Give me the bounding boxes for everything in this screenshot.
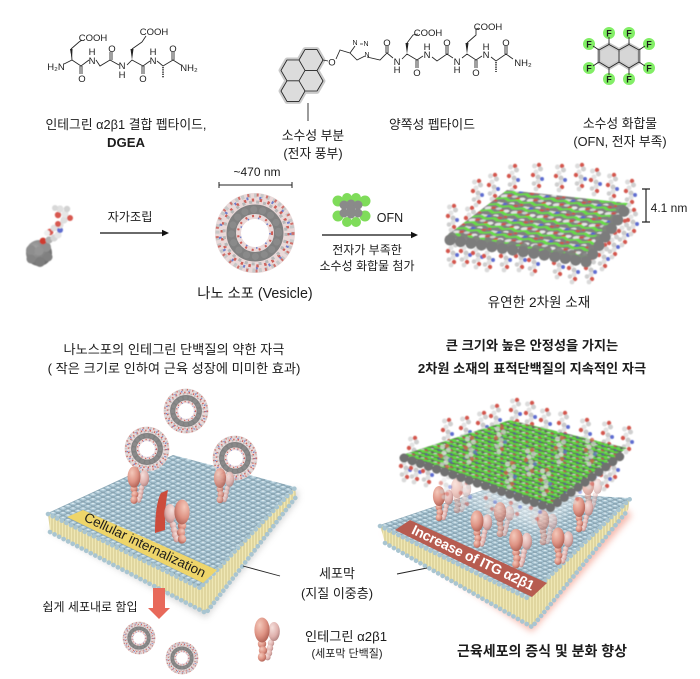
molecule: amphiphilic peptide: NH₂ xyxy=(514,58,532,69)
haze under the 2D sheet xyxy=(450,480,590,530)
dimension: about 470 nm: ~470 nm xyxy=(233,165,281,179)
molecule: amphiphilic peptide: O xyxy=(502,38,510,49)
integrin: under right vesicle xyxy=(214,468,234,503)
molecule: amphiphilic peptide: O xyxy=(328,58,336,68)
molecule: amphiphilic peptide: H xyxy=(483,42,490,53)
label: OFN: OFN xyxy=(377,211,403,225)
integrin: legend xyxy=(254,618,280,662)
dimension: 4.1 nm xyxy=(642,189,687,222)
molecule: pyrene hydrophobic part xyxy=(281,50,323,101)
integrins: on right membrane xyxy=(433,475,602,568)
molecule: amphiphilic peptide: N xyxy=(352,40,358,47)
molecule: amphiphilic peptide: N xyxy=(394,57,401,68)
band: cellular internalization: Cellular internalization xyxy=(82,510,208,580)
molecule: amphiphilic peptide: N xyxy=(363,41,369,48)
molecule: amphiphilic peptide xyxy=(323,22,532,79)
label: DGEA peptide: DGEA xyxy=(107,135,146,150)
label: DGEA peptide xyxy=(46,117,206,150)
molecule: DGEA peptide: H xyxy=(150,47,157,58)
molecule model: single peptide amphiphile xyxy=(26,205,73,267)
molecule: OFN: F xyxy=(606,28,612,38)
vesicle: internalized 1 xyxy=(123,622,155,654)
heading: weak stimulation by nano vesicle: ( 작은 크기로 인하여 근육 성장에 미미한 효과) xyxy=(48,361,300,376)
2D sheet: flexible material xyxy=(445,163,639,284)
molecule: DGEA peptide: COOH xyxy=(140,27,168,38)
molecule: OFN: F xyxy=(586,40,592,50)
heading: sustained stimulation by 2D material xyxy=(418,338,646,376)
molecule: DGEA peptide: O xyxy=(108,44,116,55)
integrin: centre xyxy=(164,500,190,544)
label: hydrophobic compound OFN xyxy=(573,116,667,149)
molecule: DGEA peptide: N xyxy=(119,61,126,72)
label: hydrophobic compound OFN: (OFN, 전자 부족) xyxy=(573,134,667,149)
heading: weak stimulation by nano vesicle xyxy=(48,342,300,376)
2D sheet: on membrane xyxy=(399,398,634,524)
molecule: OFN: F xyxy=(646,64,652,74)
label: self-assembly: 자가조립 xyxy=(108,210,152,224)
molecule: DGEA peptide: O xyxy=(139,74,147,85)
label: flexible 2D material: 유연한 2차원 소재 xyxy=(488,295,590,310)
label: hydrophobic compound OFN: 소수성 화합물 xyxy=(583,116,657,131)
panel: left cell membrane xyxy=(48,455,298,618)
band: increase of ITG: Increase of ITG α2β1 xyxy=(409,521,537,594)
curved red internalization arrow xyxy=(155,490,168,533)
label: muscle cell proliferation: 근육세포의 증식 및 분화 향상 xyxy=(457,643,627,659)
molecule: amphiphilic peptide: N xyxy=(364,52,370,59)
molecule: DGEA peptide: O xyxy=(78,74,86,85)
heading: weak stimulation by nano vesicle: 나노스포의 인테그린 단백질의 약한 자극 xyxy=(64,342,284,357)
molecule: OFN: F xyxy=(586,64,592,74)
vesicle: main xyxy=(217,195,293,271)
label: integrin legend: 인테그린 α2β1 xyxy=(305,629,387,644)
molecule: DGEA peptide xyxy=(47,27,198,85)
label: add electron-poor compound: 소수성 화합물 첨가 xyxy=(320,259,414,273)
label: hydrophobic part xyxy=(282,128,344,161)
molecule: DGEA peptide: NH₂ xyxy=(180,63,198,74)
molecule: amphiphilic peptide: O xyxy=(443,38,451,49)
molecule: amphiphilic peptide: H xyxy=(394,65,401,76)
molecule: OFN: F xyxy=(646,40,652,50)
leader line: pyrene xyxy=(307,103,309,121)
vesicle: floating top xyxy=(165,390,207,432)
label: cell membrane xyxy=(301,566,373,601)
label: add electron-poor compound: 전자가 부족한 xyxy=(332,243,402,257)
label: nano vesicle: 나노 소포 (Vesicle) xyxy=(197,285,313,302)
leader line: left membrane xyxy=(243,566,280,576)
leader line: right membrane xyxy=(397,567,432,574)
molecule: DGEA peptide: N xyxy=(89,56,96,67)
molecule: amphiphilic peptide: N xyxy=(424,50,431,61)
label: cell membrane: 세포막 xyxy=(319,566,355,581)
molecule: DGEA peptide: N xyxy=(150,56,157,67)
panel: right cell membrane xyxy=(380,490,632,632)
heading: sustained stimulation by 2D material: 2차원 소재의 표적단백질의 지속적인 자극 xyxy=(418,361,646,376)
molecule: amphiphilic peptide: O xyxy=(472,68,480,79)
molecule: amphiphilic peptide: COOH xyxy=(414,28,442,39)
arrow: add OFN xyxy=(322,232,418,238)
molecule: OFN: F xyxy=(626,28,632,38)
label: amphiphilic peptide: 양쪽성 펩타이드 xyxy=(389,117,475,132)
molecule: amphiphilic peptide: N xyxy=(483,50,490,61)
integrin: under left vesicle xyxy=(128,466,149,504)
label: DGEA peptide: 인테그린 α2β1 결합 펩타이드, xyxy=(46,117,206,132)
molecule: amphiphilic peptide: H xyxy=(424,42,431,53)
vesicle: bound right xyxy=(214,437,256,479)
molecule: DGEA peptide: H xyxy=(119,70,126,81)
label: add electron-poor compound xyxy=(320,243,414,273)
molecule: DGEA peptide: H xyxy=(89,47,96,58)
arrow: self-assembly xyxy=(100,230,169,236)
label: cell membrane: (지질 이중층) xyxy=(301,586,373,601)
arrow: into the cell xyxy=(148,588,170,619)
label: integrin legend xyxy=(305,629,387,660)
molecule: amphiphilic peptide: O xyxy=(413,68,421,79)
dimension: 4.1 nm: 4.1 nm xyxy=(651,201,687,215)
label: hydrophobic part: 소수성 부분 xyxy=(282,128,344,143)
heading: sustained stimulation by 2D material: 큰 크기와 높은 안정성을 가지는 xyxy=(446,338,618,353)
molecule: amphiphilic peptide: N xyxy=(454,57,461,68)
molecule: DGEA peptide: O xyxy=(169,44,177,55)
molecule: DGEA peptide: COOH xyxy=(79,33,107,44)
dimension: about 470 nm xyxy=(219,165,292,188)
icon: OFN space-filling xyxy=(332,193,370,227)
molecule: OFN: F xyxy=(626,74,632,84)
molecule: OFN xyxy=(583,27,655,85)
molecule: amphiphilic peptide: O xyxy=(383,38,391,49)
label: integrin legend: (세포막 단백질) xyxy=(311,647,383,660)
molecule: amphiphilic peptide: H xyxy=(454,65,461,76)
label: easily internalized: 쉽게 세포내로 함입 xyxy=(42,600,138,614)
vesicle: internalized 2 xyxy=(166,642,198,674)
molecule: DGEA peptide: H₂N xyxy=(47,62,65,73)
molecule: amphiphilic peptide: COOH xyxy=(474,22,502,33)
label: hydrophobic part: (전자 풍부) xyxy=(283,146,343,161)
molecule: OFN: F xyxy=(606,74,612,84)
vesicle: bound left xyxy=(126,428,168,470)
